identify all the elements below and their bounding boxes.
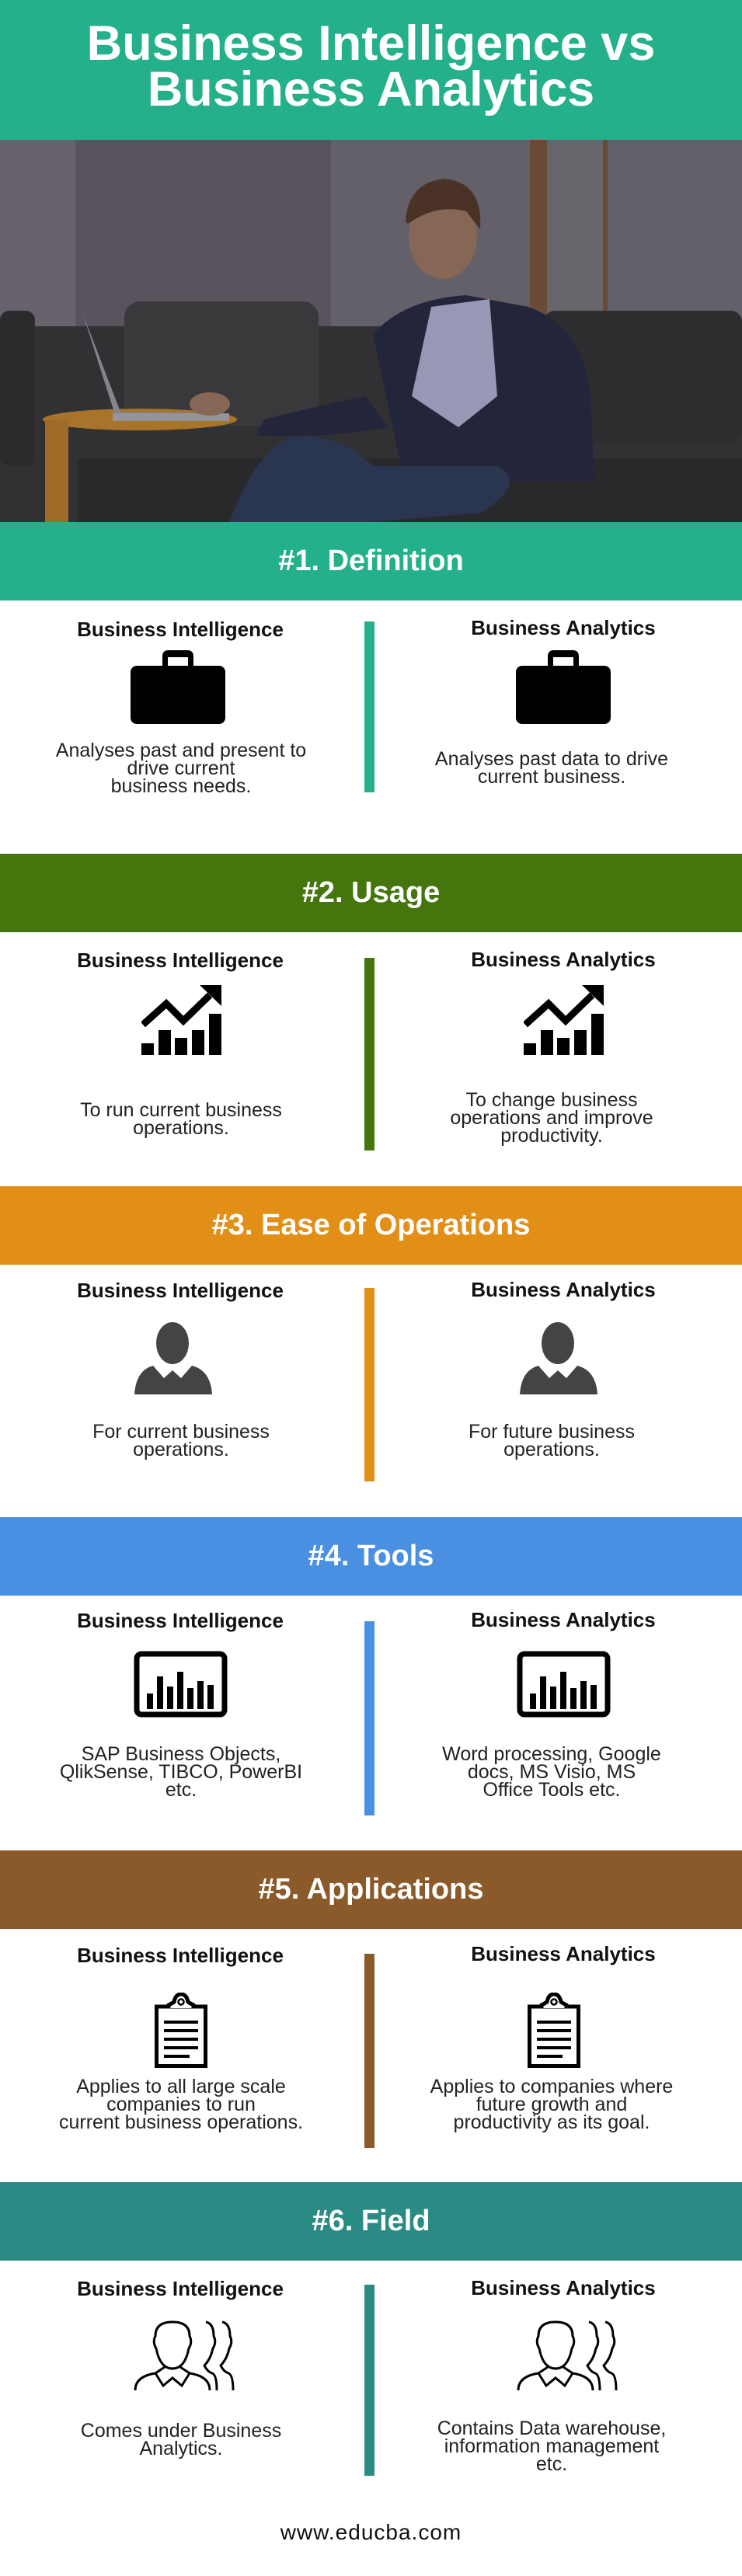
icon: clipboard BA <box>528 1993 580 2068</box>
jeans <box>229 435 510 522</box>
header: #4 Tools: #4. Tools <box>308 1540 434 1572</box>
text: BI: SAP Business Objects, <box>82 1743 280 1765</box>
header: #5 Applications <box>0 1850 742 1929</box>
header: #3 Ease of Operations <box>0 1186 742 1265</box>
title band: Business Intelligence vs <box>87 16 655 71</box>
heading: BA: Business Analytics <box>471 1608 656 1631</box>
heading: BI: Business Intelligence <box>77 618 284 641</box>
text: BI <box>81 2420 281 2459</box>
laptop <box>83 315 227 419</box>
divider <box>364 958 374 1150</box>
text: BI: Analyses past and present to <box>56 740 306 761</box>
heading: BI: Business Intelligence <box>77 2277 284 2300</box>
divider <box>364 2285 374 2476</box>
text: BA: Applies to companies where <box>430 2076 673 2097</box>
heading: BI: Business Intelligence <box>77 1944 284 1967</box>
heading: BA: Business Analytics <box>471 1942 656 1965</box>
text: BA: information management <box>444 2435 659 2457</box>
text: BI: etc. <box>165 1779 197 1801</box>
text: BI: Applies to all large scale <box>76 2076 286 2097</box>
heading: BI: Business Intelligence <box>77 1279 284 1302</box>
text: BA <box>430 2076 673 2133</box>
text: BA <box>469 1421 635 1460</box>
panel: definition <box>56 616 668 797</box>
arm <box>256 396 388 436</box>
header: #6 Field <box>0 2182 742 2261</box>
text: BA: For future business <box>469 1421 635 1443</box>
text: BA: Analyses past data to drive <box>435 748 668 770</box>
table <box>43 409 237 430</box>
header: #2 Usage: #2. Usage <box>302 876 440 909</box>
heading: BA: Business Analytics <box>471 1278 656 1301</box>
panel: usage <box>77 948 656 1150</box>
icon: person BI <box>134 1322 212 1394</box>
header: #2 Usage <box>0 854 742 932</box>
text: BI: drive current <box>127 757 235 779</box>
text: BI <box>80 1099 282 1139</box>
text: BI: For current business <box>92 1421 270 1443</box>
text: BA: To change business <box>466 1089 637 1111</box>
text: BA: Office Tools etc. <box>483 1779 620 1801</box>
heading: BI: Business Intelligence <box>77 949 284 972</box>
icon: dashboard tablet BI <box>134 1652 227 1717</box>
title band <box>0 0 742 140</box>
icon: people group BI <box>134 2321 235 2390</box>
text: BI: To run current business <box>80 1099 282 1121</box>
panel: ease of operations <box>77 1278 656 1481</box>
shirt <box>412 299 497 427</box>
text: BI: Analytics. <box>140 2438 222 2459</box>
photo: man on couch with laptop <box>0 140 742 522</box>
header: #1 Definition <box>0 522 742 600</box>
heading: BA: Business Analytics <box>471 2276 656 2299</box>
header: #4 Tools <box>0 1517 742 1596</box>
divider <box>364 1621 374 1815</box>
text: BA <box>450 1089 653 1147</box>
footer: website: www.educba.com <box>280 2520 462 2544</box>
text: BI: QlikSense, TIBCO, PowerBI <box>60 1761 302 1783</box>
header: #1 Definition: #1. Definition <box>278 545 464 577</box>
panel: applications <box>59 1942 673 2148</box>
text: BA: productivity as its goal. <box>454 2111 650 2133</box>
text: BA: Contains Data warehouse, <box>437 2418 666 2439</box>
panel: tools <box>60 1608 661 1815</box>
text: BA: future growth and <box>476 2094 627 2115</box>
header: #3 Ease of Operations: #3. Ease of Operations <box>212 1209 530 1241</box>
text: BA: operations and improve <box>450 1107 653 1129</box>
text: BI <box>60 1743 302 1801</box>
divider <box>364 621 374 792</box>
text: BA: Word processing, Google <box>442 1743 661 1765</box>
text: BI: Comes under Business <box>81 2420 281 2442</box>
heading: BI: Business Intelligence <box>77 1609 284 1632</box>
text: BA <box>442 1743 661 1801</box>
icon: people group BA <box>517 2321 617 2390</box>
heading: BA: Business Analytics <box>471 948 656 971</box>
text: BI <box>56 740 306 797</box>
text: BI <box>59 2076 303 2133</box>
text: BA <box>437 2418 666 2475</box>
jacket <box>373 295 594 482</box>
text: BI: business needs. <box>111 775 251 797</box>
text: BI: companies to run <box>106 2094 256 2115</box>
text: BI <box>92 1421 270 1460</box>
divider <box>364 1288 374 1481</box>
text: BA: current business. <box>478 766 625 788</box>
icon: clipboard BI <box>155 1993 207 2068</box>
divider <box>364 1954 374 2148</box>
icon: growth chart BA <box>524 985 604 1055</box>
panel: field <box>77 2276 666 2476</box>
text: BA: productivity. <box>500 1125 603 1147</box>
text: BI: operations. <box>133 1117 229 1139</box>
text: BA: operations. <box>503 1439 600 1460</box>
text: BA <box>435 748 668 788</box>
header: #6 Field: #6. Field <box>312 2205 430 2237</box>
head <box>409 195 477 279</box>
text: BA: docs, MS Visio, MS <box>468 1761 636 1783</box>
icon: briefcase BA <box>516 650 611 724</box>
text: BI: operations. <box>133 1439 229 1460</box>
icon: growth chart BI <box>141 985 221 1055</box>
icon: briefcase BI <box>131 650 225 724</box>
header: #5 Applications: #5. Applications <box>258 1873 483 1906</box>
text: BI: current business operations. <box>59 2111 303 2133</box>
heading: BA: Business Analytics <box>471 616 656 639</box>
icon: person BA <box>520 1322 597 1394</box>
icon: dashboard tablet BA <box>517 1652 611 1717</box>
title band: Business Analytics <box>148 62 594 117</box>
text: BA: etc. <box>536 2453 567 2475</box>
